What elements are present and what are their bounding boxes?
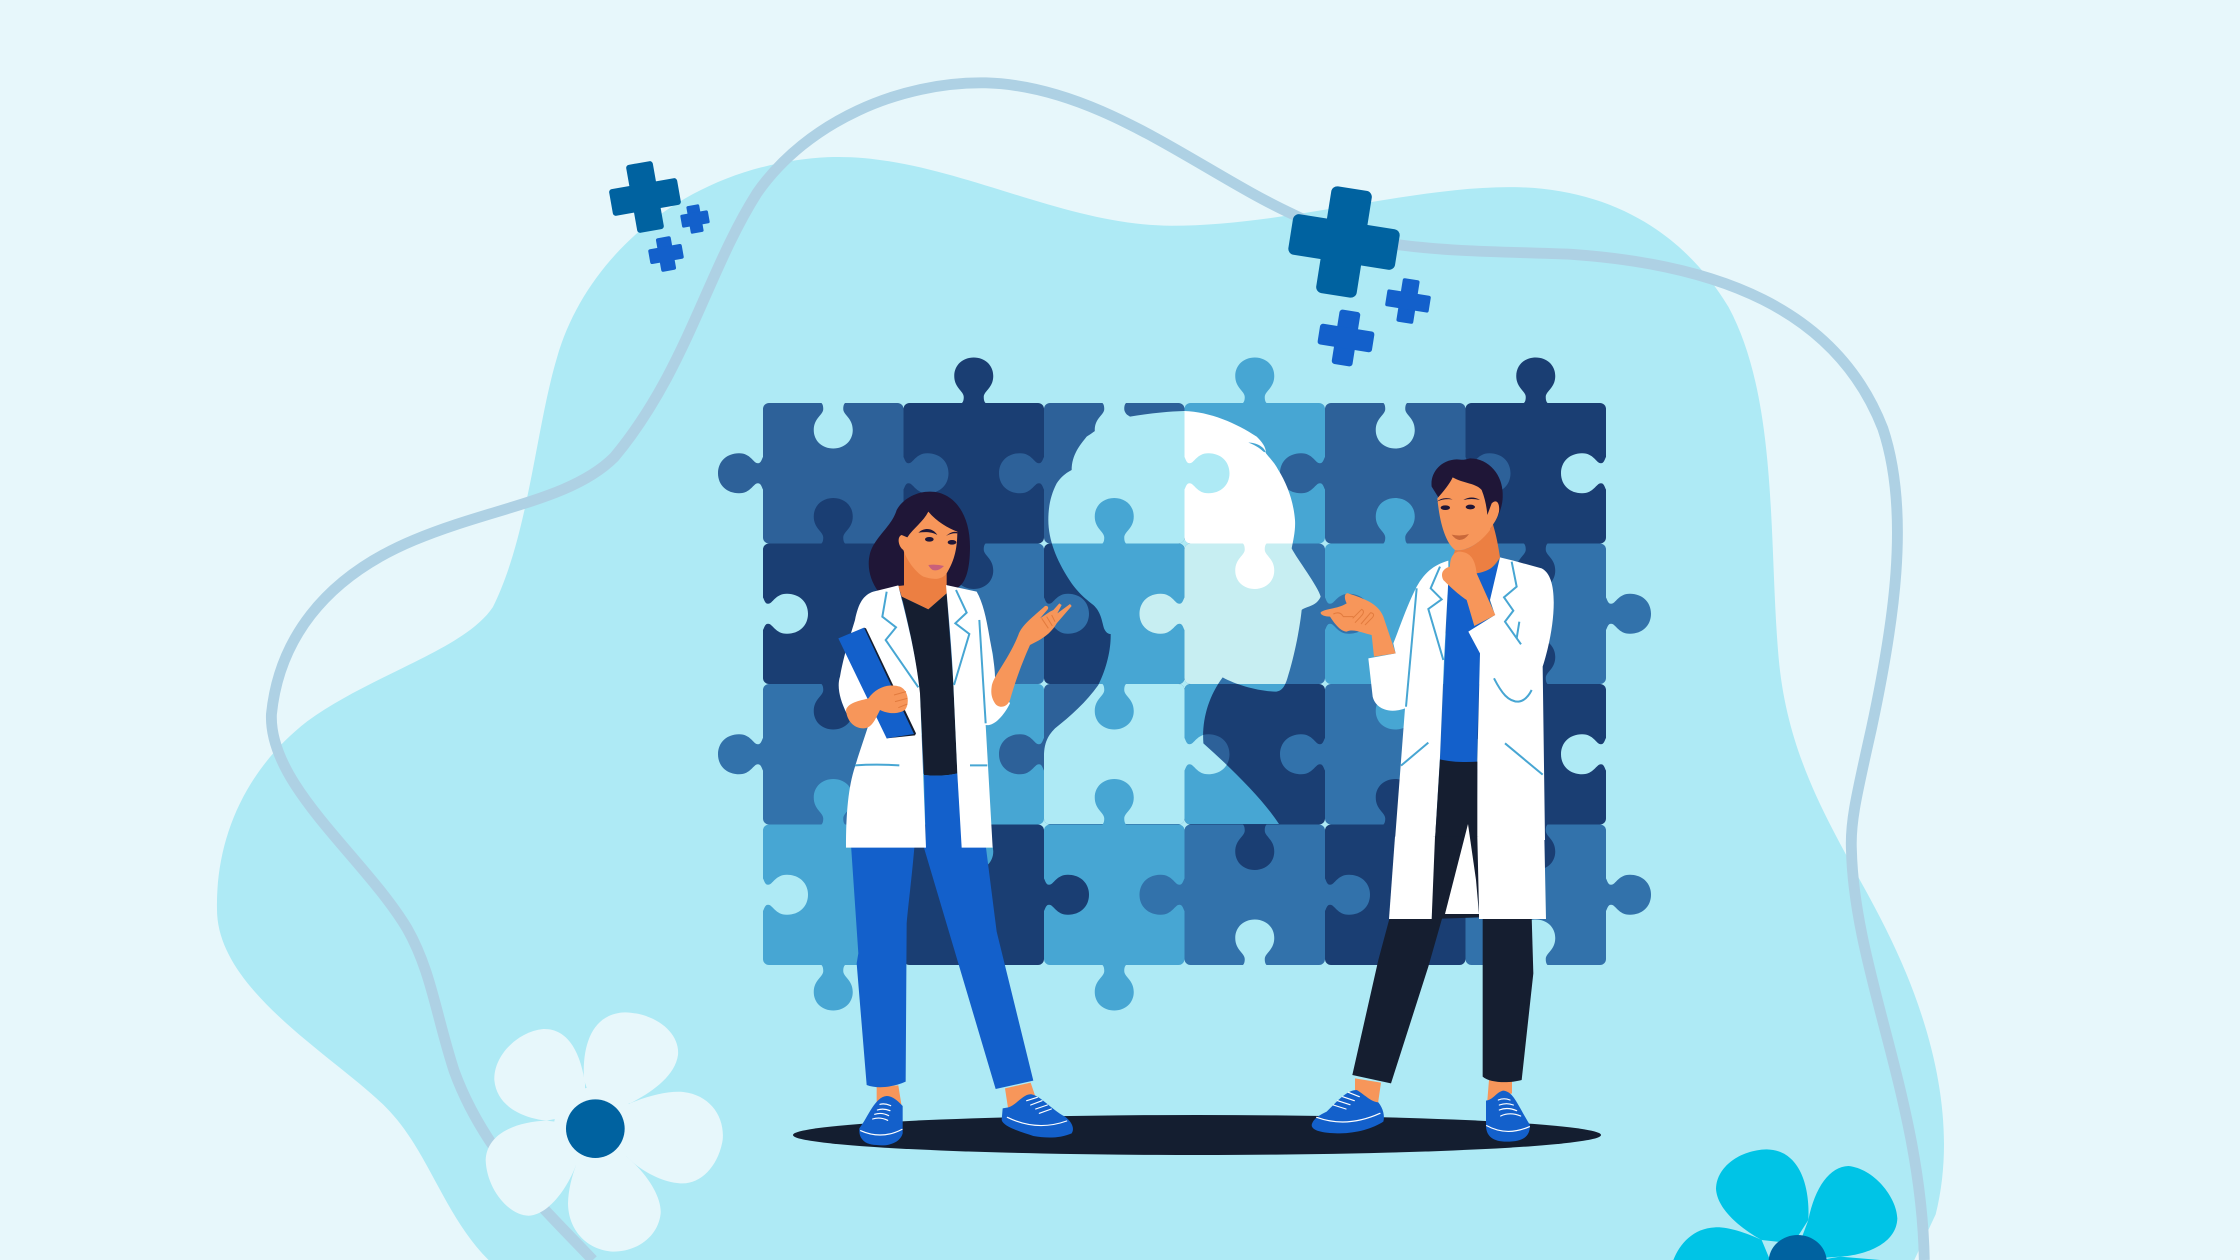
man open hand bbox=[1321, 593, 1396, 657]
man hand on chin bbox=[1442, 552, 1495, 626]
doctor: woman bbox=[838, 492, 1073, 1145]
man coat left bbox=[1368, 561, 1448, 840]
doctor: man bbox=[1312, 458, 1554, 1142]
plus: large right bbox=[1282, 180, 1406, 304]
woman legs and shoes bbox=[851, 840, 1073, 1145]
woman coat left bbox=[839, 585, 926, 848]
man waist bbox=[1435, 759, 1477, 840]
background blob bbox=[217, 157, 1944, 1260]
man coat right bbox=[1468, 557, 1554, 840]
puzzle knobs bbox=[718, 358, 1651, 1010]
flower: left bbox=[486, 1012, 723, 1252]
puzzle cells bbox=[763, 403, 1606, 965]
plus: small left bbox=[679, 203, 711, 235]
woman facial features bbox=[918, 529, 957, 570]
plus: medium right bbox=[1315, 307, 1377, 369]
woman face bbox=[899, 512, 957, 579]
man shirt bbox=[1440, 558, 1500, 763]
man face bbox=[1437, 477, 1499, 550]
puzzle wall bbox=[718, 358, 1651, 1010]
woman hair bbox=[869, 492, 970, 592]
clipboard bbox=[838, 628, 916, 738]
plus: small right bbox=[1383, 276, 1433, 326]
man hair bbox=[1431, 458, 1503, 523]
woman raised arm bbox=[991, 603, 1072, 707]
head silhouette made of recoloured puzzle pieces bbox=[1044, 403, 1325, 826]
woman neck bbox=[898, 552, 947, 609]
woman hand on clipboard bbox=[846, 685, 908, 728]
woman upper body bbox=[838, 492, 1072, 850]
man legs and shoes bbox=[1312, 840, 1533, 1142]
woman coat lines bbox=[855, 590, 987, 765]
woman coat right bbox=[946, 585, 1010, 848]
plus: large left bbox=[605, 157, 685, 237]
woman shirt bbox=[902, 593, 957, 776]
plus: medium left bbox=[646, 234, 686, 274]
man neck bbox=[1453, 523, 1500, 574]
man facial features bbox=[1437, 497, 1480, 540]
man coat hem bbox=[1389, 824, 1546, 919]
woman waist bbox=[924, 773, 962, 850]
medical plus group: left bbox=[605, 157, 711, 274]
man coat lines bbox=[1401, 562, 1543, 775]
man upper body bbox=[1321, 458, 1554, 840]
flower: right bbox=[1673, 1149, 1897, 1260]
ground shadow bbox=[793, 1115, 1601, 1155]
medical plus group: right bbox=[1282, 180, 1433, 369]
wavy outline bbox=[271, 83, 1924, 1260]
